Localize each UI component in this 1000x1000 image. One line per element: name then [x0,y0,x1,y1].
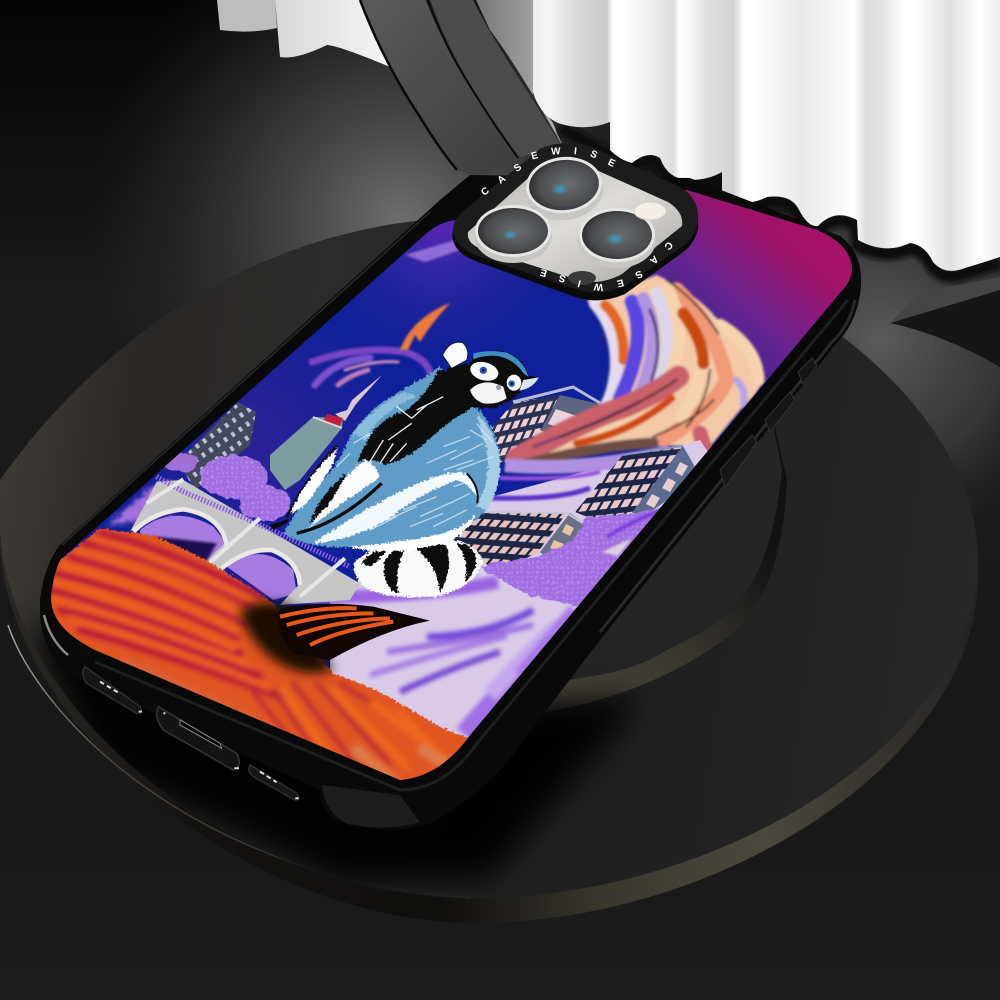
white belly sweep [313,472,478,543]
floor light left [0,0,800,600]
camera bumper highlight [453,143,698,292]
right speaker [249,765,299,800]
lemur head [443,342,539,408]
flash [634,202,666,220]
tail [353,538,483,597]
disc rim light [8,625,470,898]
inner port slot [180,720,222,748]
brand path guides [484,154,632,196]
swirl salmon stroke [663,290,727,440]
swirl violet stroke [640,298,653,393]
lidar [568,271,596,285]
arch openings [140,516,297,600]
nose [496,385,501,390]
sky [51,190,852,780]
white back lines [370,397,443,463]
arm white stripe [290,447,338,513]
ear left [443,342,468,368]
swirl dark lines [560,280,718,437]
phone shadow [25,625,640,885]
light fur shoulder [352,392,417,437]
large platform disc [0,218,978,923]
bridge in drawn coordinates [130,477,360,605]
phone case body [40,175,861,830]
pupil right [510,382,513,385]
building behind lemur right [492,387,600,462]
rust foreground [33,528,520,813]
case artwork [51,190,852,780]
arm black outline [287,446,337,517]
purple trees left [108,452,291,525]
disc surface [0,218,978,898]
feather stripes [280,608,393,645]
foot dark [270,518,290,530]
swirl purple stroke [620,302,638,398]
swirl dark plum stroke [650,310,658,380]
purple tree mass right [480,510,660,607]
feather blade [278,604,430,660]
bridge deck [130,480,360,605]
swirl lilac stroke [595,303,616,407]
swirl arm rose [517,377,678,458]
brand text: top: CASEWISE [482,147,616,195]
floor light right [600,100,1000,580]
disc side [0,530,978,923]
swirl violet edge [737,380,744,403]
ear right [519,377,539,391]
curtain: top right [533,0,1000,271]
upper-left streaks [405,240,460,262]
small platform disc [500,360,787,718]
black limb stripes [310,473,347,523]
blue body [283,367,501,547]
balustrade [157,477,350,567]
pupil left [482,369,485,372]
swirl deep orange [683,313,703,363]
eye patch right [507,375,521,391]
pale patch near edge [602,538,632,556]
arch outline [133,509,300,585]
white chest flare [312,460,380,525]
camera plate [468,164,682,282]
camera bumper base [452,147,698,300]
rust streaks [50,533,473,787]
swirl peach strokes [603,290,758,430]
rust base [33,528,520,813]
sky left violet [363,220,524,328]
brand text: bottom: CASEWISE [540,242,672,292]
brand path guide bottom [515,241,669,284]
dark arch wedge [150,536,217,567]
tower with spire [270,375,382,490]
dark smudge [240,602,333,673]
piers [147,479,345,597]
swirl rose right [700,433,708,460]
curtain contact shadow [560,128,1000,276]
side buttons [720,358,817,488]
mid lilac strokes [492,452,670,498]
left speaker [83,667,141,713]
eye patch left [468,359,500,384]
black back patch [357,370,477,465]
charging port [157,707,239,770]
eye left [480,367,487,374]
port glints [100,682,299,798]
lens: left [474,205,552,263]
lilac underlay [330,440,720,770]
background building left [178,402,256,490]
white lower band [350,513,477,552]
swirl orange stroke [605,305,623,360]
fur strokes [307,423,493,530]
black belly line [467,473,478,503]
swirl base [548,274,761,463]
swirl pale stroke [655,293,667,387]
purple stroke near edge [607,510,662,537]
lens: top [522,153,606,224]
muzzle [470,382,507,404]
camera module [452,143,698,300]
bottom ports [83,667,299,800]
dark tiger feather [240,602,430,673]
swirl lower orange [577,398,672,443]
eye right [508,380,515,387]
curtain: top left [217,0,390,67]
building right [575,446,700,522]
building centre [453,511,584,566]
lemur [270,342,539,597]
orange feather [400,303,450,350]
black thigh line [297,483,382,533]
arc stand [360,0,563,178]
swirl plum arm stripe [533,402,640,447]
curtain shadow panel [476,0,563,147]
light fur flank [477,413,500,510]
right stand [890,277,1000,367]
wisp strokes above lemur [312,350,430,385]
sky far-left tint [148,342,356,540]
swirl underside brown [517,443,653,467]
lens: right [578,208,656,268]
sky right magenta [644,190,852,438]
swirl [515,275,763,467]
lower lilac streaks [310,582,575,735]
